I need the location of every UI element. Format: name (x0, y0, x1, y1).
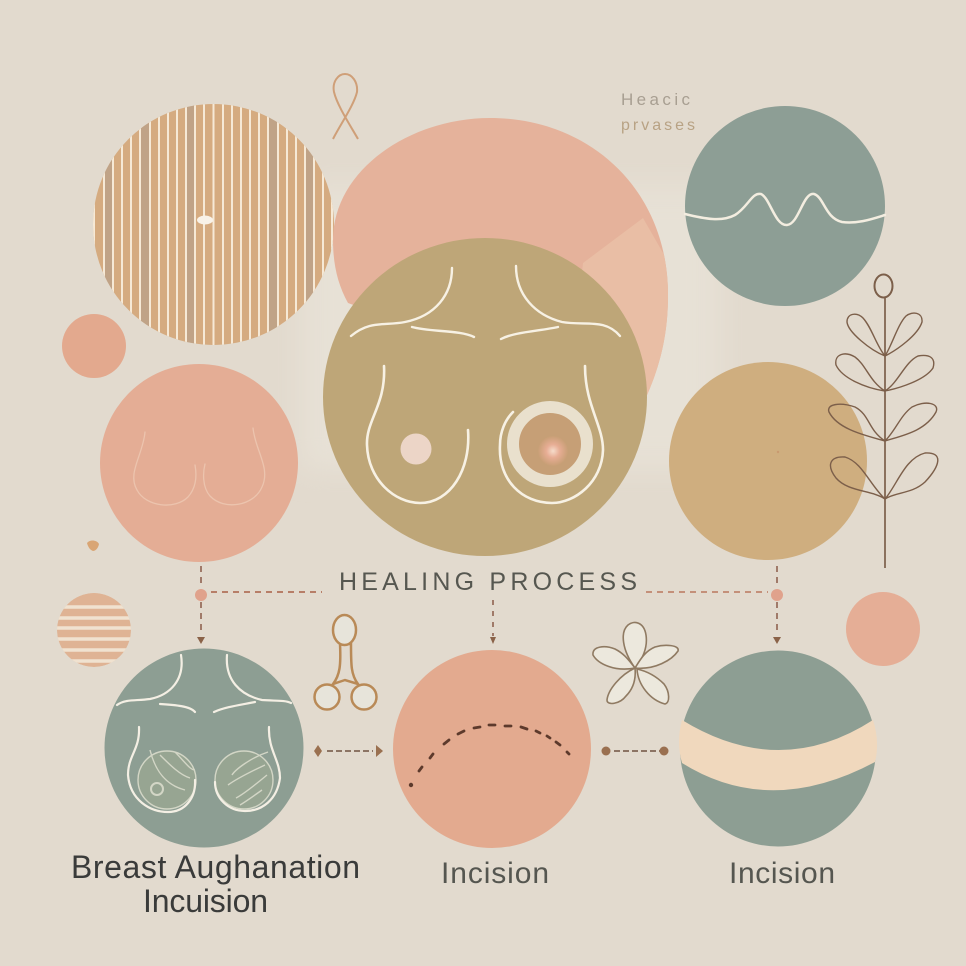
label: breast augmentation incision: Incuision (143, 883, 268, 919)
small pink circle right (846, 592, 920, 666)
panel: large pink circle (333, 118, 668, 395)
flower icon (593, 622, 678, 704)
striped circle centre mark (197, 216, 213, 224)
dashed incision arc (409, 725, 569, 787)
scissors icon (314, 615, 376, 710)
label: breast augmentation incision: Breast Aughanation (71, 849, 360, 885)
shoulder lines (351, 266, 620, 339)
panel: bottom-right sage band circle (679, 650, 877, 846)
plant icon (829, 274, 938, 568)
small label: Hescic phrases (621, 90, 695, 134)
wave line (685, 194, 885, 225)
label: incision centre: Incision (441, 857, 549, 890)
panel: left pink circle with faint outline (100, 364, 298, 562)
small diamond left (87, 540, 99, 551)
left dot (400, 434, 432, 464)
connector: right dashed (646, 566, 783, 644)
left implant (138, 750, 196, 809)
label: incision right: Incision (729, 857, 835, 890)
connector: centre dashed (490, 600, 496, 644)
heading: healing process: HEALING PROCESS (339, 568, 637, 596)
label: breast augmentation incision (71, 849, 360, 919)
arrow: right connector (602, 746, 668, 756)
arrow: left connector (314, 745, 383, 757)
panel: striped circle (93, 104, 334, 345)
connector: left dashed (195, 566, 322, 644)
small striped circle left (55, 593, 135, 667)
panel: bottom-centre pink circle (393, 650, 591, 848)
ribbon icon (333, 74, 358, 139)
panel: right tan circle (669, 362, 867, 560)
small pink circle left (62, 314, 126, 378)
panel: top-right sage wave circle (685, 106, 885, 306)
small label: Hescic phrases: Heacic (621, 90, 690, 109)
right outline (500, 366, 603, 503)
small label: Hescic phrases: prvases (621, 117, 695, 134)
panel: bottom-left sage circle (104, 648, 304, 848)
left outline (367, 366, 468, 503)
panel: central olive circle with anatomical outline (323, 238, 647, 556)
ring marker (513, 407, 587, 481)
right implant (215, 751, 273, 809)
